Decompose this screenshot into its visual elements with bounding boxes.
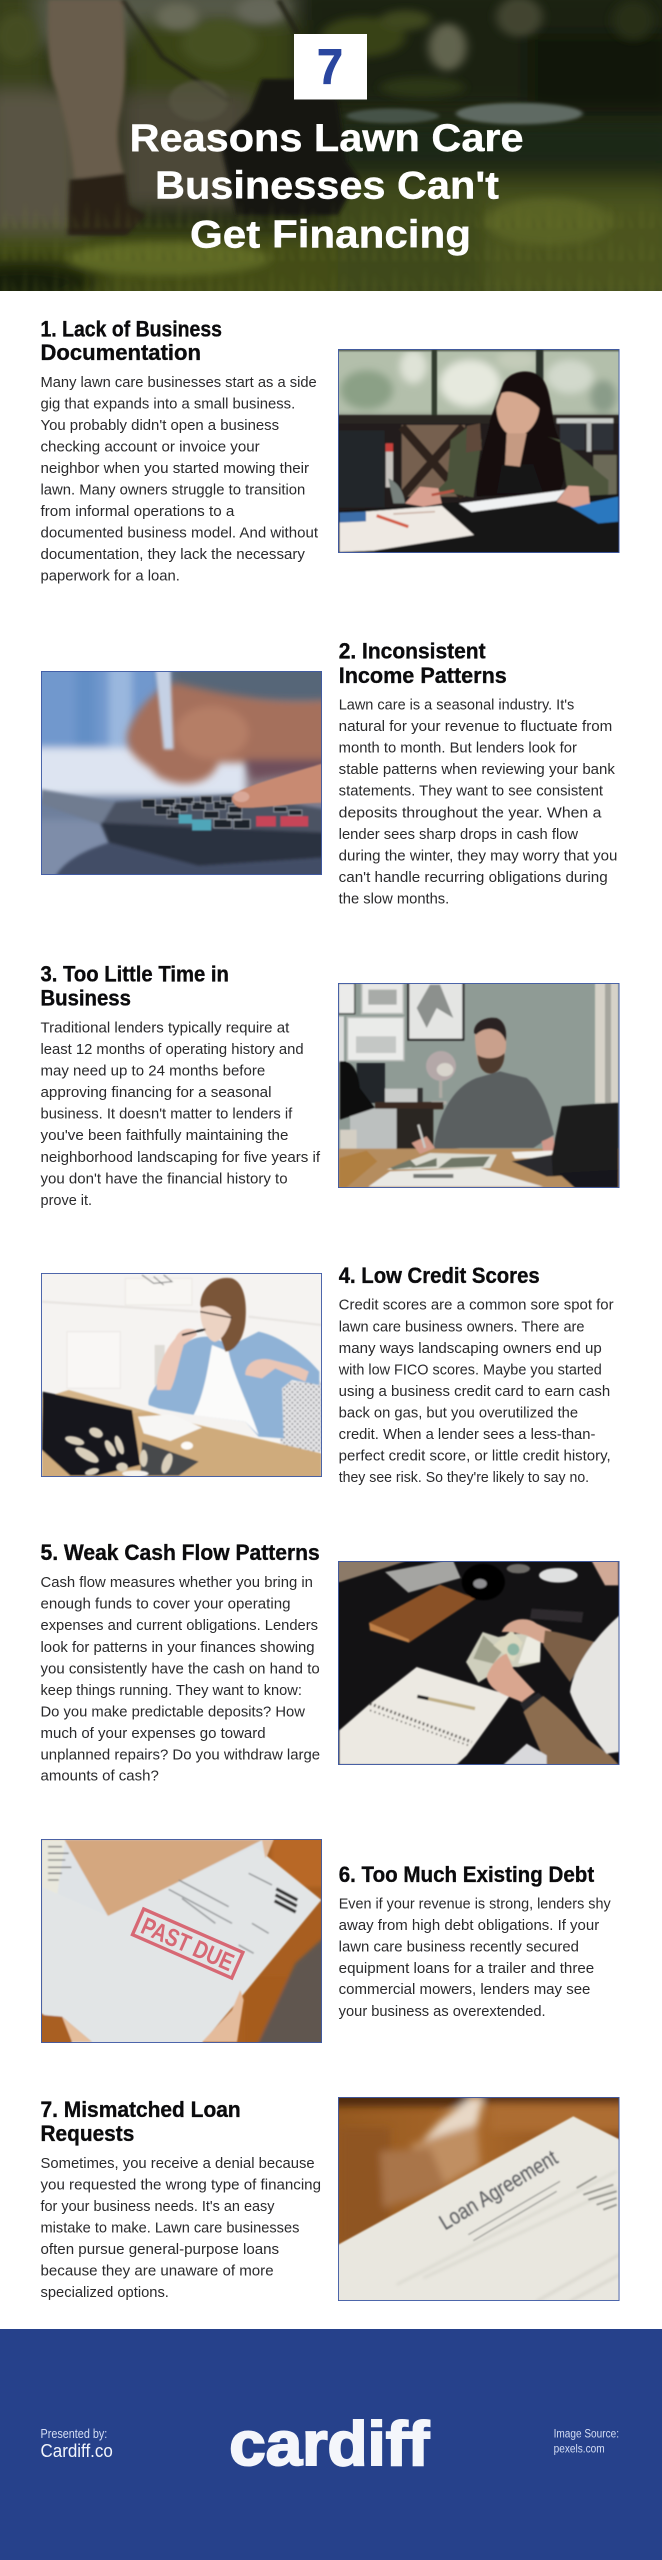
heading 7: [40, 2097, 241, 2146]
body text 7: mistake to make. Lawn care businesses: [40, 2220, 299, 2236]
heading 3: Business: [40, 986, 131, 1011]
body text 4: many ways landscaping owners end up: [339, 1341, 602, 1357]
body text 2: deposits throughout the year. When a: [339, 805, 602, 821]
heading 2: 2. Inconsistent: [339, 639, 486, 664]
presented by: Cardiff.co: [40, 2441, 113, 2461]
body text 3: you don't have the financial history to: [40, 1171, 288, 1187]
body text 4: back on gas, but you overutilized the: [339, 1406, 578, 1422]
body text 6: Even if your revenue is strong, lenders shy: [339, 1896, 611, 1912]
panel: reason 1: [40, 316, 637, 585]
header photo: lawn mower on grass: [0, 0, 662, 291]
number 7 badge: [294, 34, 367, 100]
body text 5: Cash flow measures whether you bring in: [40, 1575, 313, 1591]
body text 5: keep things running. They want to know:: [40, 1683, 302, 1699]
body text 3: prove it.: [40, 1193, 92, 1209]
body text 1: neighbor when you started mowing their: [40, 461, 309, 477]
heading 7: Requests: [40, 2121, 134, 2146]
header banner: [0, 0, 662, 306]
heading 1: 1. Lack of Business: [40, 316, 222, 341]
body text 4: Credit scores are a common sore spot for: [339, 1298, 614, 1314]
body text 3: Traditional lenders typically require at: [40, 1020, 289, 1036]
body text 4: using a business credit card to earn cash: [339, 1384, 610, 1400]
body text 1: paperwork for a loan.: [40, 569, 180, 585]
heading 1: [40, 316, 222, 365]
body text 5: much of your expenses go toward: [40, 1726, 266, 1742]
heading 2: [339, 639, 507, 688]
body text 2: the slow months.: [339, 892, 449, 908]
body text 3: least 12 months of operating history and: [40, 1042, 304, 1058]
body text 2: can't handle recurring obligations during: [339, 870, 608, 886]
cardiff logo: cardiff: [229, 2410, 430, 2479]
heading 7: 7. Mismatched Loan: [40, 2097, 241, 2122]
body text 5: enough funds to cover your operating: [40, 1597, 290, 1613]
body text 1: documented business model. And without: [40, 526, 318, 542]
body text 3: [40, 1020, 321, 1209]
body text 2: during the winter, they may worry that you: [339, 848, 617, 864]
body text 2: natural for your revenue to fluctuate from: [339, 719, 612, 735]
footer: [0, 2329, 662, 2560]
body text 2: month to month. But lenders look for: [339, 741, 577, 757]
body text 2: [339, 698, 617, 908]
body text 6: lawn care business recently secured: [339, 1940, 579, 1956]
body text 5: Do you make predictable deposits? How: [40, 1704, 305, 1720]
title: Get Financing: [190, 214, 471, 256]
body text 5: [40, 1575, 320, 1785]
body text 5: you consistently have the cash on hand to: [40, 1661, 320, 1677]
title: [130, 117, 524, 256]
heading 3: 3. Too Little Time in: [40, 962, 229, 986]
body text 7: Sometimes, you receive a denial because: [40, 2156, 315, 2172]
document title: [435, 2145, 617, 2241]
title: Reasons Lawn Care: [130, 117, 524, 160]
body text 6: commercial mowers, lenders may see: [339, 1982, 590, 1998]
body text 3: may need up to 24 months before: [40, 1064, 265, 1080]
body text 7: because they are unaware of more: [40, 2263, 274, 2279]
photo: hand on calculator: [41, 671, 322, 875]
body text 6: equipment loans for a trailer and three: [339, 1961, 594, 1977]
number 7 badge: 7: [317, 39, 343, 95]
body text 5: look for patterns in your finances showing: [40, 1640, 315, 1656]
image source: [554, 2426, 619, 2456]
body text 1: lawn. Many owners struggle to transition: [40, 482, 305, 498]
image source: Image Source:: [554, 2426, 619, 2440]
body text 4: lawn care business owners. There are: [339, 1319, 584, 1335]
body text 1: [40, 375, 318, 585]
body text 3: neighborhood landscaping for five years if: [40, 1150, 321, 1166]
body text 6: [339, 1896, 611, 2020]
body text 5: unplanned repairs? Do you withdraw large: [40, 1748, 320, 1764]
heading 2: Income Patterns: [339, 663, 507, 688]
heading 3: [40, 962, 229, 1011]
body text 1: checking account or invoice your: [40, 440, 260, 456]
panel: reason 2: [25, 639, 617, 908]
photo: counting cash over notebook: [338, 1561, 620, 1765]
heading 4: 4. Low Credit Scores: [339, 1263, 540, 1288]
body text 2: statements. They want to see consistent: [339, 784, 603, 800]
body text 4: with low FICO scores. Maybe you started: [338, 1362, 602, 1378]
body text 1: documentation, they lack the necessary: [40, 547, 306, 563]
body text 3: you've been faithfully maintaining the: [40, 1128, 288, 1144]
body text 7: you requested the wrong type of financing: [40, 2178, 321, 2194]
body text 7: specialized options.: [40, 2285, 169, 2301]
photo: loan agreement on wood table: [338, 2097, 620, 2301]
heading 6: 6. Too Much Existing Debt: [339, 1862, 595, 1887]
image source: pexels.com: [554, 2442, 605, 2456]
body text 1: from informal operations to a: [40, 504, 235, 520]
photo: woman reviewing paperwork: [338, 349, 620, 553]
presented by: [40, 2427, 113, 2461]
heading 1: Documentation: [40, 340, 201, 365]
body text 2: stable patterns when reviewing your bank: [339, 762, 616, 778]
body text 7: for your business needs. It's an easy: [40, 2199, 275, 2215]
body text 4: perfect credit score, or little credit history,: [339, 1449, 611, 1465]
body text 2: lender sees sharp drops in cash flow: [339, 827, 579, 843]
photo: man at desk with cash: [338, 983, 620, 1188]
photo: past due notice: [41, 1839, 322, 2043]
body text 7: often pursue general-purpose loans: [40, 2242, 279, 2258]
body text 6: away from high debt obligations. If your: [339, 1918, 599, 1934]
body text 1: Many lawn care businesses start as a side: [40, 375, 317, 391]
heading 5: 5. Weak Cash Flow Patterns: [40, 1540, 320, 1565]
body text 6: your business as overextended.: [339, 2004, 546, 2020]
photo: woman thinking at laptop: [41, 1273, 322, 1477]
body text 3: business. It doesn't matter to lenders if: [40, 1107, 293, 1123]
body text 2: Lawn care is a seasonal industry. It's: [339, 698, 574, 714]
title: Businesses Can't: [155, 165, 499, 208]
body text 4: they see risk. So they're likely to say no.: [339, 1470, 589, 1486]
body text 4: credit. When a lender sees a less-than-: [339, 1427, 596, 1443]
panel: reason 4: [32, 1263, 614, 1487]
document title: Loan Agreement: [435, 2145, 562, 2235]
presented by: Presented by:: [40, 2427, 107, 2441]
body text 5: amounts of cash?: [40, 1769, 159, 1785]
body text 4: [338, 1298, 614, 1486]
body text 1: You probably didn't open a business: [40, 418, 279, 434]
body text 3: approving financing for a seasonal: [40, 1085, 272, 1101]
body text 5: expenses and current obligations. Lenders: [40, 1618, 318, 1634]
panel: reason 6: [32, 1830, 611, 2057]
panel: reason 7: [40, 2088, 637, 2310]
body text 1: gig that expands into a small business.: [40, 396, 295, 412]
panel: reason 5: [40, 1540, 630, 1785]
stamp: past due: PAST DUE: [137, 1913, 238, 1977]
panel: reason 3: [40, 962, 630, 1209]
body text 7: [40, 2156, 321, 2301]
